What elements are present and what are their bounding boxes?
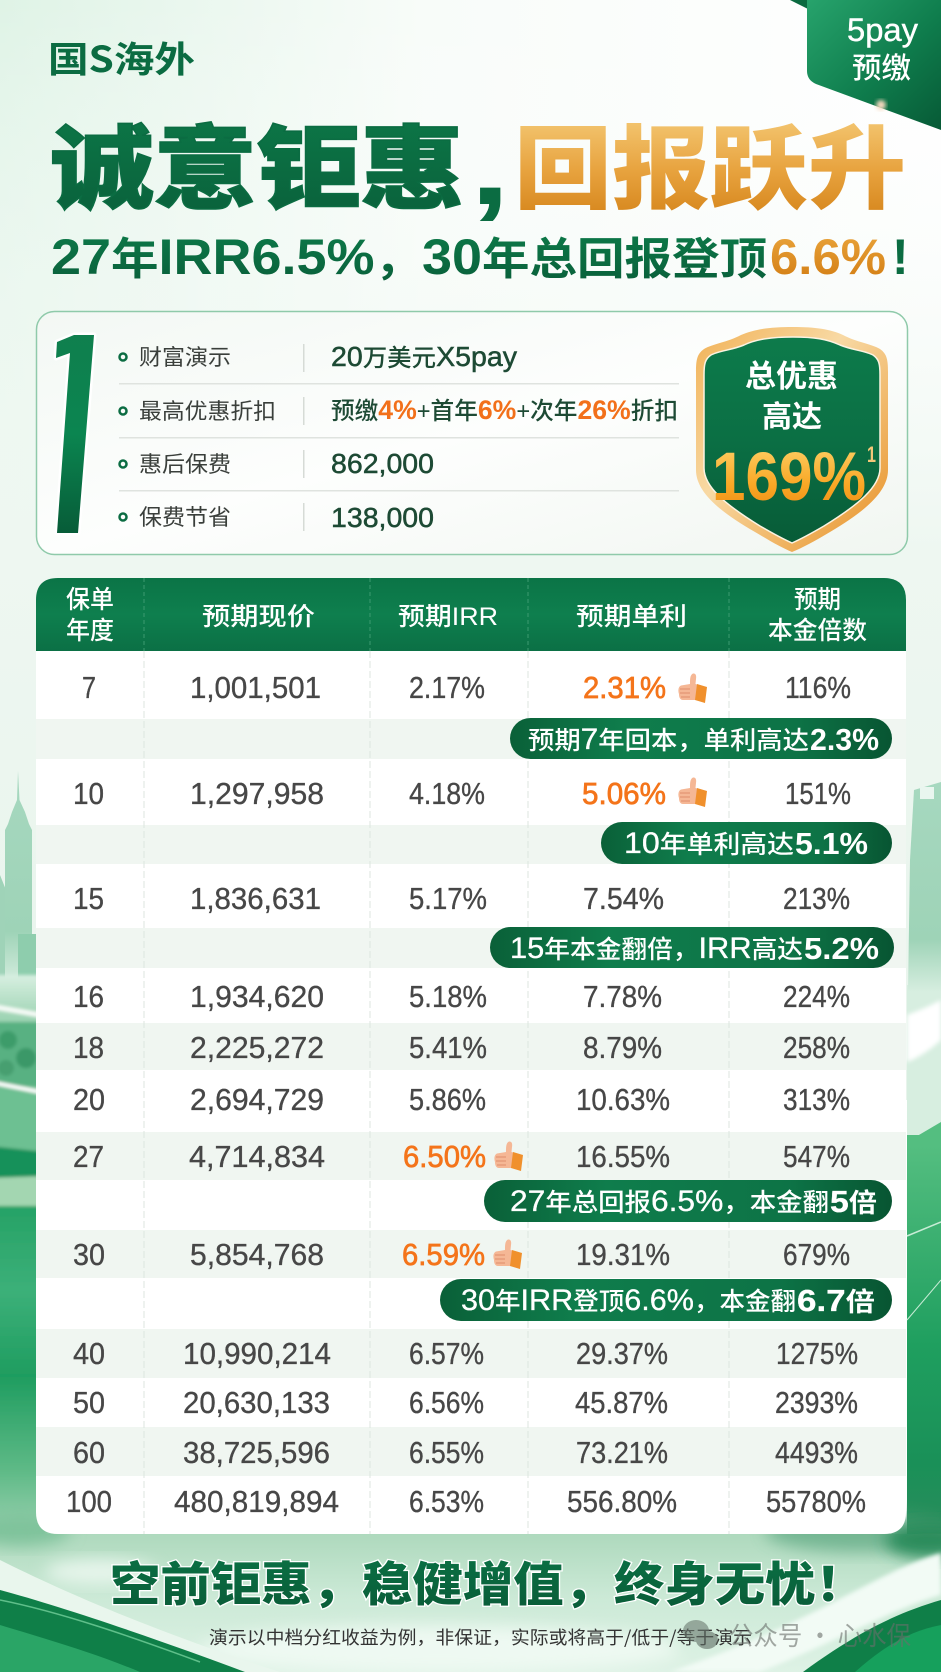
row: year 20 — [73, 1082, 850, 1117]
big numeral 1 — [56, 335, 94, 533]
subtitle: 27年IRR6.5% ，30年总回报登顶 — [51, 229, 767, 285]
row: year 20: 10.63% — [576, 1082, 670, 1117]
row: year 7: 116% — [785, 670, 851, 705]
row: year 30: 19.31% — [576, 1237, 670, 1272]
callout pill: 10 year simple interest: 5.1% — [795, 826, 868, 861]
row: 保费节省 — [120, 500, 434, 533]
row: year 60: 6.55% — [409, 1435, 484, 1470]
row: year 100: 6.53% — [409, 1484, 484, 1519]
row: year 40: 29.37% — [576, 1336, 668, 1371]
shield badge: 总优惠高达169%: 169% — [712, 438, 866, 515]
table header: 本金倍数 — [768, 617, 867, 645]
row: year 20: 20 — [73, 1082, 105, 1117]
row: year 27: 16.55% — [576, 1139, 670, 1174]
row: year 7 — [82, 670, 851, 705]
cityscape right — [908, 782, 941, 992]
row: year 60: 73.21% — [576, 1435, 668, 1470]
row: year 40: 6.57% — [409, 1336, 484, 1371]
forest and waves left — [0, 975, 46, 1546]
panel: premium summary — [36, 312, 908, 554]
row: year 30: 30 — [73, 1237, 105, 1272]
row: 财富演示: 20万美元X5pay — [331, 341, 517, 372]
row: year 100: 556.80% — [567, 1484, 677, 1519]
row: year 50: 6.56% — [409, 1385, 484, 1420]
row: year 40: 1275% — [776, 1336, 858, 1371]
row: year 10: 4.18% — [409, 776, 485, 811]
row: year 30: 6.59% — [402, 1237, 485, 1272]
slogan: 空前钜惠，稳健增值，终身无忧！ — [110, 1546, 866, 1615]
row: year 10: 10 — [73, 776, 104, 811]
row: year 15: 5.17% — [409, 881, 487, 916]
row: year 16: 224% — [783, 979, 850, 1014]
row: 最高优惠折扣: 预缴4%+首年6%+次年26%折扣 — [331, 395, 678, 425]
table body background — [36, 640, 906, 1534]
row: 财富演示 — [120, 340, 517, 372]
row: year 50: 45.87% — [575, 1385, 668, 1420]
row: year 100: 480,819,894 — [174, 1484, 339, 1519]
row: year 100 — [66, 1484, 866, 1519]
row: year 16: 5.18% — [409, 979, 487, 1014]
shield badge: 总优惠高达169%: 1 — [867, 442, 876, 467]
callout pill: 10 year simple interest: 10年单利高达 — [624, 827, 794, 860]
row: year 20: 5.86% — [409, 1082, 486, 1117]
row: year 7: 7 — [82, 670, 96, 705]
watermark: 公众号 · 心水保 — [729, 1616, 911, 1653]
row: year 15: 15 — [73, 881, 104, 916]
row: year 20: 313% — [783, 1082, 850, 1117]
corner ribbon: 5pay 预缴: 5pay — [847, 12, 918, 48]
row: year 50: 50 — [73, 1385, 105, 1420]
row: year 30: 5,854,768 — [190, 1237, 324, 1272]
callout pill: 30 year peak IRR: 6.7倍 — [797, 1283, 875, 1318]
brand tag: 国S海外: 国S海外 — [48, 31, 195, 83]
row: year 18: 18 — [73, 1030, 104, 1065]
row: year 27: 6.50% — [403, 1139, 486, 1174]
callout pill: 10 year simple interest — [601, 822, 892, 864]
callout pill: 27 year return: 5倍 — [830, 1184, 877, 1219]
subtitle: 6.6% — [770, 229, 886, 285]
row: year 100: 55780% — [766, 1484, 866, 1519]
row: year 20: 2,694,729 — [190, 1082, 324, 1117]
row: year 40 — [73, 1336, 858, 1371]
callout pill: 27 year return: 27年总回报6.5%，本金翻 — [510, 1185, 829, 1218]
cityscape left — [0, 771, 36, 1000]
row: year 50 — [73, 1385, 858, 1420]
callout pill: 7 year payback: 2.3% — [810, 722, 879, 757]
table header: 保单 — [66, 586, 114, 614]
callout pill: 30 year peak IRR: 30年IRR登顶6.6%，本金翻 — [461, 1284, 796, 1317]
row: year 15: 7.54% — [583, 881, 664, 916]
row: year 7: 2.31% — [583, 670, 666, 705]
shield badge: 总优惠高达169% — [696, 327, 888, 552]
callout pill: 30 year peak IRR — [440, 1279, 892, 1321]
row: year 40: 40 — [73, 1336, 105, 1371]
corner ribbon: 5pay 预缴 — [790, 0, 941, 130]
callout pill: 7 year payback — [510, 718, 892, 759]
row: 保费节省: 保费节省 — [139, 500, 231, 532]
main title: 诚意钜惠 — [50, 96, 464, 228]
row: year 16 — [73, 979, 850, 1014]
row: year 16: 7.78% — [583, 979, 662, 1014]
table header: 预期单利 — [576, 603, 687, 631]
row: year 60 — [73, 1435, 858, 1470]
row: year 10: 1,297,958 — [190, 776, 324, 811]
row: year 27 — [73, 1139, 850, 1174]
row: year 18: 5.41% — [409, 1030, 487, 1065]
row: year 18: 2,225,272 — [190, 1030, 324, 1065]
callout pill: 27 year return — [484, 1180, 892, 1222]
row: 财富演示: 财富演示 — [139, 340, 231, 372]
row: year 15: 213% — [783, 881, 850, 916]
row: year 7: 2.17% — [409, 670, 485, 705]
row: year 50: 2393% — [775, 1385, 858, 1420]
row: year 60: 38,725,596 — [183, 1435, 330, 1470]
row: 惠后保费: 惠后保费 — [139, 447, 231, 479]
row: year 30 — [73, 1237, 850, 1272]
callout pill: 15 year doubling — [490, 927, 894, 968]
callout pill: 15 year doubling: 5.2% — [804, 931, 879, 966]
shield badge: 总优惠高达169%: 高达 — [762, 392, 822, 436]
row: year 7: 1,001,501 — [190, 670, 321, 705]
table — [36, 578, 906, 1534]
callout pill: 15 year doubling: 15年本金翻倍，IRR高达 — [510, 932, 803, 965]
table header: 预期现价 — [202, 603, 315, 631]
row: year 50: 20,630,133 — [183, 1385, 330, 1420]
row: 惠后保费 — [120, 447, 434, 479]
table header: 预期IRR — [398, 603, 498, 631]
corner ribbon: 5pay 预缴: 预缴 — [852, 45, 911, 87]
row: year 10: 5.06% — [582, 776, 666, 811]
main title — [50, 96, 906, 228]
row: year 27: 547% — [783, 1139, 850, 1174]
icon: wechat — [683, 1620, 718, 1649]
main title: 回报跃升 — [514, 96, 906, 228]
waves right — [907, 985, 941, 1545]
disclaimer: 演示以中档分红收益为例，非保证，实际或将高于/低于/等于演示 — [209, 1624, 752, 1650]
row: year 15: 1,836,631 — [190, 881, 321, 916]
row: year 10: 151% — [785, 776, 851, 811]
callout pill: 7 year payback: 预期7年回本，单利高达 — [528, 723, 809, 756]
row: year 60: 60 — [73, 1435, 105, 1470]
row: year 15 — [73, 881, 850, 916]
row: year 10 — [73, 776, 851, 811]
row: 最高优惠折扣 — [120, 394, 678, 426]
table header: 年度 — [66, 617, 114, 645]
table header — [36, 578, 906, 651]
row: year 18: 8.79% — [583, 1030, 662, 1065]
row: year 27: 4,714,834 — [189, 1139, 325, 1174]
row: year 16: 16 — [73, 979, 104, 1014]
row: year 40: 10,990,214 — [183, 1336, 331, 1371]
row: year 30: 679% — [783, 1237, 850, 1272]
row: 惠后保费: 862,000 — [331, 448, 434, 479]
row: year 18: 258% — [783, 1030, 850, 1065]
subtitle: ! — [892, 229, 909, 285]
row: 保费节省: 138,000 — [331, 502, 434, 533]
row: year 27: 27 — [73, 1139, 104, 1174]
main title: , — [470, 105, 510, 228]
table header: 预期 — [794, 586, 841, 614]
row: year 100: 100 — [66, 1484, 112, 1519]
bottom waves — [0, 1512, 941, 1672]
row: year 60: 4493% — [775, 1435, 858, 1470]
row: year 16: 1,934,620 — [190, 979, 324, 1014]
row: year 18 — [73, 1030, 850, 1065]
row: 最高优惠折扣: 最高优惠折扣 — [139, 394, 276, 426]
shield badge: 总优惠高达169%: 总优惠 — [745, 351, 838, 396]
